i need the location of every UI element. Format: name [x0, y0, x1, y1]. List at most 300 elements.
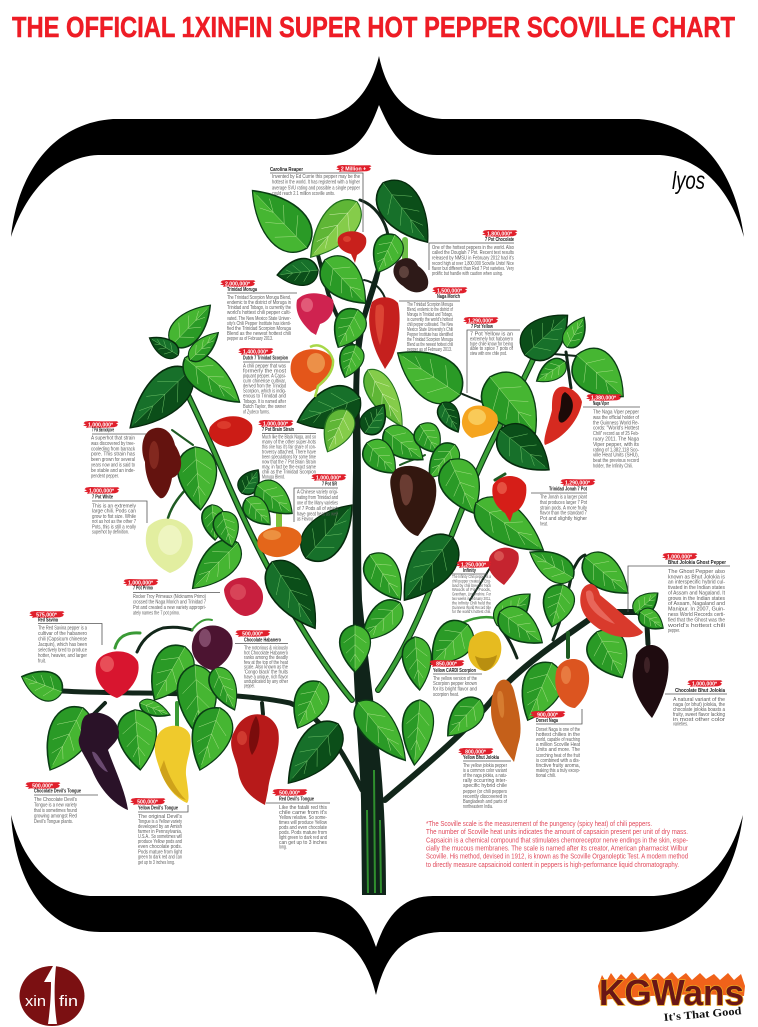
pepper: Yellow CARDI Scorpion [468, 631, 501, 671]
description: is a common color variant [463, 768, 507, 774]
description: world, capable of reaching [536, 737, 580, 743]
description: pepper as of February 2013. [407, 347, 452, 353]
description: Scorpion, which is indig- [243, 389, 286, 395]
stems and branches [62, 200, 648, 800]
description: Blend as the newest hottest chili [407, 342, 453, 348]
description: cultivar of the habanero [38, 631, 87, 637]
pepper: 7 Pot SR [257, 527, 302, 557]
callout: Trinidad Jonah 7 Pot [531, 479, 596, 528]
scoville badge: 1,000,000* [128, 580, 154, 586]
callout: Dutch 7 Trinidad Scorpion [238, 348, 290, 415]
description [433, 676, 477, 698]
leader lines [628, 566, 730, 612]
description: chocolate jolokia boasts a [673, 707, 725, 713]
description: growing amongst Red [34, 814, 77, 820]
logo: xin1fin [20, 966, 84, 1026]
scoville badge: 1,290,000* [468, 318, 494, 324]
tagline: It's That Good [663, 1005, 742, 1024]
description: Mexico State University's Chili [407, 327, 453, 333]
scoville badge: 850,000* [436, 661, 458, 667]
description: Tongue is a Yellow variety [138, 819, 182, 825]
description: record high at over 1,800,000 Scoville Units! Nice [432, 261, 514, 267]
description: fruity, sweet flavor lacking [673, 712, 725, 718]
description [133, 594, 206, 616]
leader lines [38, 624, 102, 645]
description: this one has it's fair share of con- [262, 444, 316, 450]
description: world's hottest chili pepper culti- [227, 310, 291, 316]
description: Grantham, Lincolnshire. For [452, 592, 491, 597]
description: released by NMSU in February 2012 had it's [432, 256, 514, 262]
scoville badge: 800,000* [465, 749, 487, 755]
pepper: 7 Pot Chocolate [393, 258, 428, 292]
description: The Trinidad Scorpion Moruga Blend, [227, 295, 291, 301]
description: Dorset Naga is one of the [536, 727, 580, 733]
pepper: 7 Pot Primo [224, 578, 263, 616]
description: sity's Chili Pepper Institute has identi- [227, 321, 291, 327]
description: large chili. Pods can [92, 509, 136, 515]
description [673, 697, 725, 728]
description: A Chinese variety origi- [297, 490, 338, 496]
scoville badge: 1,500,000* [437, 288, 463, 294]
callout: Infinity [452, 561, 492, 614]
description: of 7 Pods all of which [297, 506, 338, 512]
description: This is an extremely [92, 504, 136, 510]
heading: 7 Pot Yellow [471, 324, 493, 330]
pepper: Carolina Reaper [338, 231, 366, 263]
description: light green to dark red and [279, 835, 327, 841]
heading: Trinidad Moruga [227, 287, 258, 293]
description: hotter, heavier, and larger [38, 653, 87, 659]
heading: Red Savina [38, 618, 59, 624]
leader lines [34, 794, 98, 796]
description: derived from the Trinidad [243, 384, 286, 390]
description: tivated in the Indian states [668, 585, 725, 591]
callout: Carolina Reaper [270, 165, 372, 232]
top curly brace [11, 56, 744, 237]
heading: 7 Pot White [92, 494, 113, 500]
description [244, 646, 288, 690]
description [272, 174, 360, 197]
scoville badge: 1,000,000* [667, 554, 693, 560]
pepper: Dorset Naga [555, 659, 589, 708]
description [92, 504, 136, 536]
description: was discovered by tree- [91, 441, 135, 447]
description: Pots, this is still a really [92, 524, 136, 530]
description: A chili pepper that was [243, 364, 286, 370]
leader lines [270, 173, 363, 232]
description: scorching heat of the fruit [536, 753, 580, 759]
description: ately names the 7 pot primo. [133, 610, 180, 616]
foliage [17, 171, 668, 795]
description: Trinidad and Tobago, is currently the [227, 305, 291, 311]
scoville badge: 500,000* [32, 783, 54, 789]
description: The Jonah is a larger plant [540, 494, 587, 500]
description: 7 Pot Yellow is an [470, 332, 513, 338]
description: pepper. [668, 628, 680, 634]
description: chile came from it's [279, 810, 327, 816]
description: specific hybrid chile [463, 783, 507, 789]
description [91, 436, 135, 479]
description: type chile know for being [470, 341, 513, 347]
main trunk [353, 262, 386, 895]
description: two weeks in February 2011, [452, 596, 491, 601]
description: The Red Savina pepper is a [38, 626, 87, 632]
description [536, 727, 580, 779]
scoville badge: 575,000* [36, 612, 58, 618]
description: Guinness World Record title [452, 605, 491, 610]
heading: Yellow Bhut Jolokia [463, 755, 500, 761]
description: stew with one chile pod. [470, 351, 507, 357]
description: land by chili breeder Nick [452, 583, 492, 588]
description: that produces larger 7 Pot [540, 500, 587, 506]
description: for its bright flavor and [433, 686, 477, 692]
description: naga (or bhut) jolokia, the [673, 702, 725, 708]
description: not as hot as the other 7 [92, 519, 136, 525]
description: The Ghost Pepper also [668, 569, 725, 575]
description: Woods of Fire Foods, [452, 587, 491, 592]
description: pendent pepper. [91, 473, 119, 479]
heading: Chocolate Bhut Jolokia [675, 688, 726, 694]
pepper: 7 Pot Yellow [462, 406, 498, 438]
description: of Assam and Nagaland. It [668, 590, 726, 596]
description: grows in the Indian states [668, 596, 725, 602]
description: hottest in the world. It has registered with a higher [272, 180, 360, 186]
description: troversy attached. There have [262, 450, 316, 456]
description: get up to 3 inches long. [138, 860, 175, 866]
description: is currently the world's hottest [407, 317, 453, 323]
pepper: Red Devil's Tongue [231, 714, 279, 805]
scoville badge: 1,250,000* [461, 562, 487, 568]
pepper: Naga Morich [369, 297, 400, 369]
description: now that the 7 Pot Brain Strain [262, 460, 316, 466]
scoville scale footnote: *The Scoville scale is the measurement of the pungency (spicy heat) of chili peppers. [426, 821, 652, 828]
description: scorpion heat. [433, 692, 459, 698]
callout: 7 Pot Primo [123, 579, 220, 616]
scoville scale footnote [426, 821, 689, 869]
description: tinctive fruity aroma, [536, 763, 580, 769]
description [593, 410, 639, 470]
description: known as Bhut Jolokia is [668, 574, 725, 580]
description: ness World Records certi- [668, 612, 725, 618]
callout: Naga Viper [583, 394, 640, 470]
heading: Yellow CARDI Scorpion [433, 668, 476, 674]
description: pepper as of February 2013. [227, 336, 273, 342]
heading: 7 Pot SR [322, 482, 337, 488]
description: produce Yellow pods and [138, 839, 182, 845]
pepper: Trinidad Jonah 7 Pot [492, 476, 526, 522]
description: unduplicated by any other [244, 679, 288, 685]
callout: Yellow Bhut Jolokia [458, 748, 511, 810]
description: crossed the Naga Morich and Trinidad 7 [133, 600, 206, 606]
description [297, 490, 338, 522]
description: chili pepper created in Eng- [452, 578, 491, 583]
description: green to dark red and can [138, 854, 182, 860]
description: rating of 1,382,118 Sco- [593, 447, 639, 453]
pepper: Chocolate Habanero [192, 625, 233, 670]
description: chili pepper cultivated. The New [407, 322, 453, 328]
description: superhot by definition. [92, 530, 129, 536]
description: have a unique, rich flavor [244, 674, 288, 680]
description: strain pods. A more fruity [540, 505, 587, 511]
callout: 7 Pot Barrackpore: 7 Pot Barrackpore [92, 428, 114, 434]
description: pods. Pods mature from [279, 830, 327, 836]
heading: Yellow Devil's Tongue [138, 806, 178, 812]
heading: Trinidad Jonah 7 Pot [549, 486, 587, 492]
description: that is sometimes found [34, 808, 77, 814]
description: varieties. [673, 722, 688, 728]
pepper: Trinidad Moruga [296, 293, 334, 335]
description: cords: "World's Hottest [593, 426, 639, 432]
leader lines [235, 642, 288, 644]
description: times will produce Yellow [279, 820, 327, 826]
description [38, 626, 87, 664]
description: ruary 2011. The Naga [593, 436, 639, 442]
description [407, 302, 453, 353]
description: holder, the Infinity Chili. [593, 464, 633, 470]
description: developed by an Amish [138, 824, 182, 830]
heading: Chocolate Devil's Tongue [34, 788, 81, 794]
description: Invented by Ed Currie this pepper may be the [272, 174, 360, 180]
pepper: Yellow Bhut Jolokia [491, 680, 521, 762]
leader lines [92, 433, 146, 435]
description: One of the hottest peppers in the world. Also [432, 245, 514, 251]
description: as Flavour. [297, 516, 314, 522]
scoville badge: 1,000,000* [89, 488, 115, 494]
description: long. [279, 844, 287, 850]
leader lines [92, 501, 147, 523]
heading: Naga Viper [593, 401, 609, 407]
description: chili as the Trinidad Scorpion [262, 470, 316, 476]
description: 'Congo black' the fruits [244, 670, 288, 676]
description: in most other color [673, 717, 725, 723]
description: endemic to the district of Moruga in [227, 300, 291, 306]
pepper: 7 Pot White [146, 519, 193, 573]
pepper: 7 Pot Brain Strain [209, 416, 252, 447]
scoville badge: 1,000,000* [263, 421, 289, 427]
scoville scale footnote: The number of Scoville heat units indicates the amount of capsaicin present per unit of dry mass. [426, 829, 688, 836]
bottom curly brace [11, 815, 743, 995]
description: can get up to 3 inches [279, 840, 327, 846]
description: Much like the Black Naga, and so [262, 434, 316, 440]
description [432, 245, 514, 277]
pepper: Infinity [488, 548, 519, 585]
description: cum chinense cultivar, [243, 379, 286, 385]
pepper plant illustration [17, 171, 669, 895]
description: Pods mature from light [138, 850, 182, 856]
scoville badge: 500,000* [279, 790, 301, 796]
leader lines [399, 300, 460, 302]
heading: 7 Pot Chocolate [485, 237, 514, 243]
description: Blend as the newest hottest chili [227, 331, 291, 337]
description: recently discovered in [463, 794, 507, 800]
pepper: Yellow Devil's Tongue [155, 726, 191, 803]
description: heat. [540, 522, 548, 528]
description: beat the previous record [593, 458, 639, 464]
heading: Infinity [463, 568, 477, 574]
scoville badge: 1,000,000* [316, 475, 342, 481]
description: Butch Taylor, the owner [243, 404, 286, 410]
description: fruit. [38, 658, 46, 664]
leader lines [531, 492, 587, 494]
description: one of the Many varieties [297, 500, 338, 506]
description: piquant pepper. A Capsi- [243, 374, 286, 380]
heading: 7 Pot Brain Strain [262, 427, 294, 433]
description: an interspecific hybrid cul- [668, 580, 725, 586]
scoville badge: 1,800,000* [487, 231, 513, 237]
scoville badge: 900,000* [537, 712, 559, 718]
description [540, 494, 587, 528]
description: Like the fatalii red this [279, 805, 327, 811]
heading: Bhut Jolokia Ghost Pepper [668, 560, 727, 566]
description: formerly the most [243, 368, 287, 374]
description: pepper. [244, 684, 255, 690]
pepper: Naga Viper [544, 387, 582, 445]
description: a million Scoville Heat [536, 742, 580, 748]
description: northeastern India. [463, 804, 493, 810]
scoville badge: 1,000,000* [692, 681, 718, 687]
heading: Chocolate Habanero [244, 638, 281, 644]
heading: Carolina Reaper [270, 167, 304, 173]
description: pore. This strain has [91, 452, 135, 458]
callout: Yellow CARDI Scorpion [429, 660, 482, 698]
description: is combined with a dis- [536, 758, 580, 764]
description: A natural variant of the [673, 697, 725, 703]
callout: 7 Pot SR [294, 474, 346, 522]
callout: 7 Pot Barrackpore [83, 421, 146, 479]
leader lines [463, 760, 511, 762]
description: Bangladesh and parts of [463, 799, 507, 805]
description: for the world's hottest chili. [452, 609, 491, 614]
description [227, 295, 291, 342]
description [452, 574, 492, 614]
description: fied that the Ghost was the [668, 617, 725, 623]
description: have great heat as well [297, 512, 338, 518]
pepper: 7 Pot Barrackpore [142, 428, 181, 498]
leader lines [452, 573, 488, 575]
description: pepper (or chili peppers [463, 789, 507, 795]
description: flavor but different than Red 7 Pot varieties. Very [432, 266, 514, 272]
scoville badge: 1,380,000* [591, 395, 617, 401]
description [262, 434, 316, 480]
leader lines [266, 802, 330, 804]
heading: Naga Morich [437, 294, 460, 300]
callout: Red Devil's Tongue [266, 789, 330, 850]
logo: xin1fin: fin [59, 993, 78, 1010]
description: flavor than the standard 7 [540, 511, 587, 517]
description: of Assam, Nagaland and [668, 601, 725, 607]
leader lines [138, 805, 188, 812]
description: The Trinidad Scorpion Moruga [407, 302, 453, 308]
heading: Red Devil's Tongue [279, 796, 314, 802]
description: Blend, endemic to the district of [407, 307, 453, 313]
description: Jacquin), which has been [38, 642, 87, 648]
description: called the Douglah 7 Pot. Recent test results [432, 250, 514, 256]
leader lines [433, 673, 482, 675]
description: farmer in Pennsylvania, [138, 829, 182, 835]
description [138, 814, 182, 866]
callout: 7 Pot Chocolate [429, 230, 518, 277]
description: enous to Trinidad and [243, 394, 286, 400]
description: average SVU rating and possible a single pepper [272, 185, 360, 191]
description: Units and more. The [536, 747, 580, 753]
description [34, 797, 77, 825]
description: ranks among the deadly [244, 655, 288, 661]
description: the Guinness World Re- [593, 420, 639, 426]
description: was the official holder of [593, 415, 639, 421]
description: The Chocolate Devil's [34, 797, 77, 803]
description: been speculations for some time [262, 454, 316, 460]
logo: KGWans: KGWans [599, 972, 744, 1013]
scoville badge: 2,000,000* [225, 281, 251, 287]
description: been grown for several [91, 457, 135, 463]
description: grow to fist size. While [92, 514, 136, 520]
description: hot Chocolate Habanero [244, 650, 288, 656]
description: selectively bred to produce [38, 648, 87, 654]
description: The yellow version of the [433, 676, 477, 682]
artist signature: lyos [672, 167, 705, 195]
leader lines [536, 709, 582, 724]
description: Yellow relative. So some- [279, 815, 327, 821]
callout: Trinidad Moruga [220, 280, 297, 342]
description [243, 364, 287, 415]
description: ville Heat Units (SHU), [593, 453, 639, 459]
description: of the naga jolokia, a natu- [463, 773, 507, 779]
description: scale. Also known as the [244, 665, 288, 671]
description: chili (Capsicum chinense [38, 636, 87, 642]
description [470, 332, 513, 357]
leader lines [243, 361, 290, 363]
description: tional chili. [536, 773, 556, 779]
scoville scale footnote: Scoville. His method, devised in 1912, is known as the Scoville Organoleptic Test. A modern method [426, 854, 688, 861]
pepper: Dutch 7 Trinidad Scorpion [291, 345, 333, 397]
scoville badge: 1,000,000* [88, 422, 114, 428]
description: The Naga Viper pepper [593, 410, 639, 416]
description: Tongue is a new variety [34, 802, 77, 808]
description: fied the Trinidad Scorpion Moruga [227, 326, 291, 332]
description: able to spice 7 pots of [470, 346, 513, 352]
description [668, 569, 726, 634]
description: pods and even chocolate [279, 825, 327, 831]
heading: 7 Pot Primo [133, 586, 153, 592]
scoville scale footnote: cially the mucous membranes. The scale is named after its creator, American pharmacist Wilbur [426, 846, 689, 852]
description: Rocker Troy Primeaux (Nicknamw Primo) [133, 594, 206, 600]
description: The yellow jolokia pepper [463, 763, 507, 769]
scoville badge: 500,000* [242, 631, 264, 637]
callout: Red Savina [29, 611, 102, 664]
description: Pot and slightly higher [540, 516, 587, 522]
callout: Chocolate Devil's Tongue [25, 782, 98, 825]
pepper: Chocolate Devil's Tongue [79, 713, 128, 810]
description: cooleding from barrack [91, 446, 135, 452]
leader lines [583, 406, 640, 408]
scoville badge: 1,400,000* [243, 349, 269, 355]
heading: Dorset Naga [536, 718, 559, 724]
description: making this a truly excep- [536, 768, 580, 774]
leader lines [429, 243, 514, 270]
description: The Infinity Chili pepper is a [452, 574, 491, 579]
leader lines [227, 292, 297, 294]
callout: Chocolate Bhut Jolokia [665, 680, 727, 728]
description: Viper pepper, with its [593, 442, 639, 448]
description: Devil's Tongue plants. [34, 819, 73, 825]
description: extremely hot habanero [470, 336, 513, 342]
callout: Naga Morich [399, 287, 468, 353]
description: could reach 2.1 million scoville units. [272, 191, 335, 197]
description: Moruga in Trinidad and Tobago, [407, 312, 453, 318]
description: Scorpion pepper known [433, 681, 477, 687]
description: many of the other super-hots [262, 440, 316, 446]
callout: 7 Pot Brain Strain [258, 420, 316, 480]
